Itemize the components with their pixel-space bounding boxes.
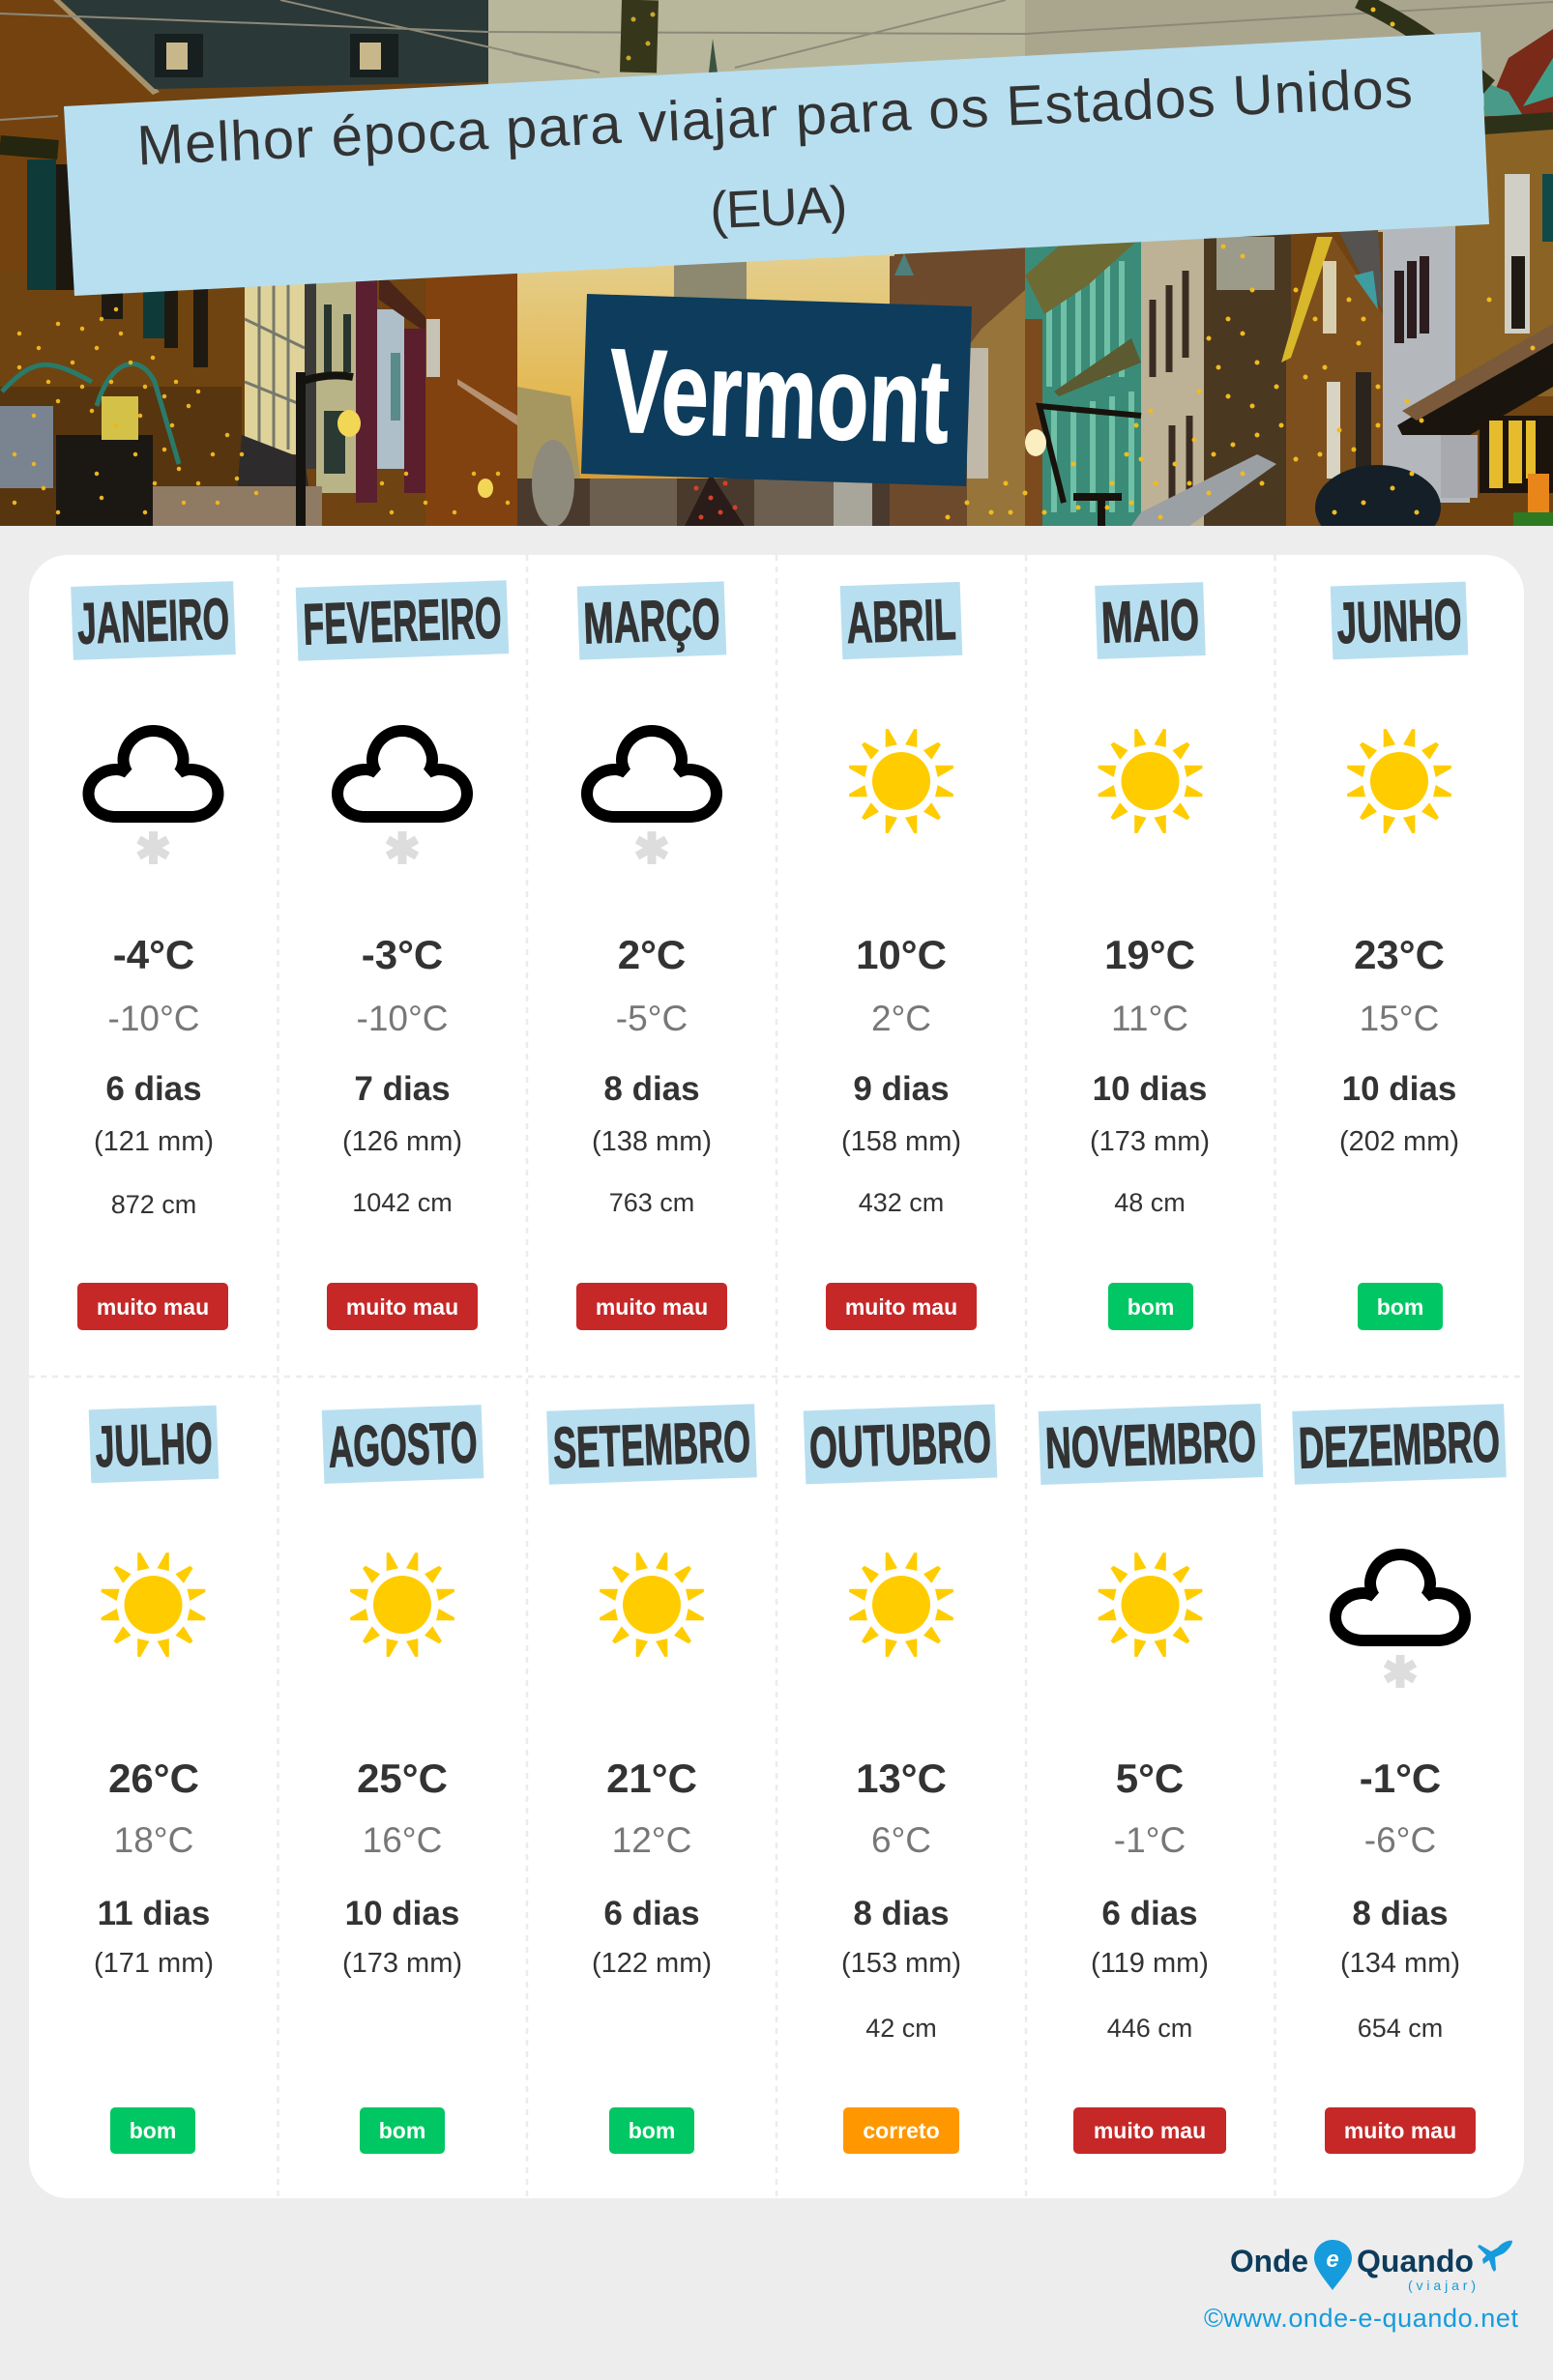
month: setembro: 12°C (612, 1820, 691, 1860)
month: abril: 10°C (856, 932, 947, 977)
month: setembro: 21°C (606, 1756, 697, 1801)
month: novembro: muito mau (1094, 2118, 1206, 2143)
month: dezembro: (134 mm) (1340, 1948, 1460, 1979)
month: janeiro (71, 581, 236, 1330)
month: maio: (173 mm) (1090, 1126, 1210, 1157)
month: novembro: 446 cm (1107, 2014, 1192, 2043)
month: outubro: correto (863, 2118, 940, 2143)
month: janeiro: -4°C (113, 932, 194, 977)
month: novembro: 5°C (1116, 1756, 1184, 1801)
month: maio: 19°C (1104, 932, 1195, 977)
month: novembro (1039, 1404, 1263, 2154)
title banner (64, 32, 1489, 296)
title banner: (EUA) (709, 176, 848, 240)
month: janeiro: JANEIRO (76, 586, 230, 656)
month: março: muito mau (596, 1294, 708, 1320)
month: junho: 10 dias (1342, 1070, 1456, 1108)
month: abril: ABRIL (845, 587, 957, 655)
month: agosto (322, 1405, 483, 2154)
month: outubro (804, 1405, 997, 2154)
month: fevereiro: (126 mm) (342, 1126, 462, 1157)
month: junho: 15°C (1360, 999, 1439, 1038)
title banner: Melhor época para viajar para os Estados Unidos (135, 57, 1414, 177)
month: março: (138 mm) (592, 1126, 712, 1157)
month: dezembro (1292, 1404, 1507, 2154)
month: julho: 26°C (108, 1756, 199, 1801)
month: janeiro: 6 dias (105, 1070, 202, 1108)
month: dezembro: -1°C (1360, 1756, 1441, 1801)
month: novembro: -1°C (1114, 1820, 1186, 1860)
month: outubro: (153 mm) (841, 1948, 961, 1979)
month: julho: JULHO (94, 1410, 214, 1479)
month: junho: JUNHO (1335, 587, 1463, 655)
month: setembro: SETEMBRO (552, 1408, 751, 1481)
month: junho: 23°C (1354, 932, 1445, 977)
website credit: ©www.onde-e-quando.net (1204, 2304, 1518, 2333)
header photo: street with lights (0, 0, 1553, 550)
month: abril: 432 cm (859, 1188, 944, 1217)
month: maio: MAIO (1100, 587, 1200, 655)
logo: Onde e Quando: (viajar) (1408, 2278, 1476, 2293)
month: julho: bom (130, 2118, 176, 2143)
month: maio: 11°C (1111, 999, 1188, 1038)
month: setembro (546, 1404, 757, 2154)
month: janeiro: (121 mm) (94, 1126, 214, 1157)
month: julho: 11 dias (98, 1895, 210, 1932)
month: abril (826, 582, 977, 1330)
month: junho (1331, 582, 1468, 1330)
panel: monthly calendar (29, 555, 1524, 2198)
month: novembro: (119 mm) (1091, 1948, 1209, 1979)
month: março: 2°C (618, 932, 686, 977)
month: maio: 48 cm (1114, 1188, 1186, 1217)
month: julho: (171 mm) (94, 1948, 214, 1979)
month: fevereiro: FEVEREIRO (302, 585, 503, 657)
state name: Vermont: Vermont (607, 325, 952, 469)
month: outubro: 42 cm (865, 2014, 937, 2043)
month: março (576, 581, 727, 1330)
state name: Vermont (581, 294, 972, 486)
month: agosto: 10 dias (345, 1895, 459, 1932)
month: março: 763 cm (609, 1188, 694, 1217)
month: abril: muito mau (845, 1294, 957, 1320)
month: outubro: 13°C (856, 1756, 947, 1801)
month: setembro: bom (629, 2118, 675, 2143)
month: agosto: 25°C (357, 1756, 448, 1801)
month: fevereiro (296, 580, 509, 1330)
month: junho: bom (1377, 1294, 1423, 1320)
month: janeiro: 872 cm (111, 1190, 196, 1219)
month: abril: 2°C (871, 999, 931, 1038)
month: dezembro: -6°C (1364, 1820, 1436, 1860)
month: fevereiro: 7 dias (354, 1070, 451, 1108)
month: dezembro: 8 dias (1352, 1895, 1449, 1932)
month: outubro: 8 dias (853, 1895, 950, 1932)
month: setembro: 6 dias (603, 1895, 700, 1932)
month: outubro: 6°C (871, 1820, 931, 1860)
month: junho: (202 mm) (1339, 1126, 1459, 1157)
month: abril: (158 mm) (841, 1126, 961, 1157)
logo: Onde e Quando: Quando (1357, 2244, 1474, 2278)
month: julho: 18°C (114, 1820, 193, 1860)
month: agosto: 16°C (363, 1820, 442, 1860)
month: março: MARÇO (582, 587, 721, 655)
month: fevereiro: -3°C (362, 932, 443, 977)
month: março: 8 dias (603, 1070, 700, 1108)
month: janeiro: muito mau (97, 1294, 209, 1320)
month: fevereiro: -10°C (356, 999, 449, 1038)
month: agosto: AGOSTO (327, 1409, 479, 1480)
month: novembro: NOVEMBRO (1044, 1408, 1257, 1481)
logo: Onde e Quando: Onde (1230, 2244, 1308, 2278)
month: agosto: bom (379, 2118, 425, 2143)
month: maio (1090, 582, 1210, 1330)
logo: Onde e Quando: e (1326, 2247, 1339, 2273)
month: fevereiro: muito mau (346, 1294, 458, 1320)
month: dezembro: 654 cm (1358, 2014, 1443, 2043)
month: maio: 10 dias (1093, 1070, 1207, 1108)
logo: Onde e Quando (1230, 2240, 1512, 2293)
month: abril: 9 dias (853, 1070, 950, 1108)
month: agosto: (173 mm) (342, 1948, 462, 1979)
month: janeiro: -10°C (108, 999, 199, 1038)
month: julho (89, 1406, 219, 2154)
month: fevereiro: 1042 cm (352, 1188, 453, 1217)
month: novembro: 6 dias (1101, 1895, 1198, 1932)
month: maio: bom (1128, 1294, 1174, 1320)
month: outubro: OUTUBRO (808, 1409, 992, 1480)
month: março: -5°C (616, 999, 688, 1038)
month: setembro: (122 mm) (592, 1948, 712, 1979)
month: dezembro: muito mau (1344, 2118, 1456, 2143)
